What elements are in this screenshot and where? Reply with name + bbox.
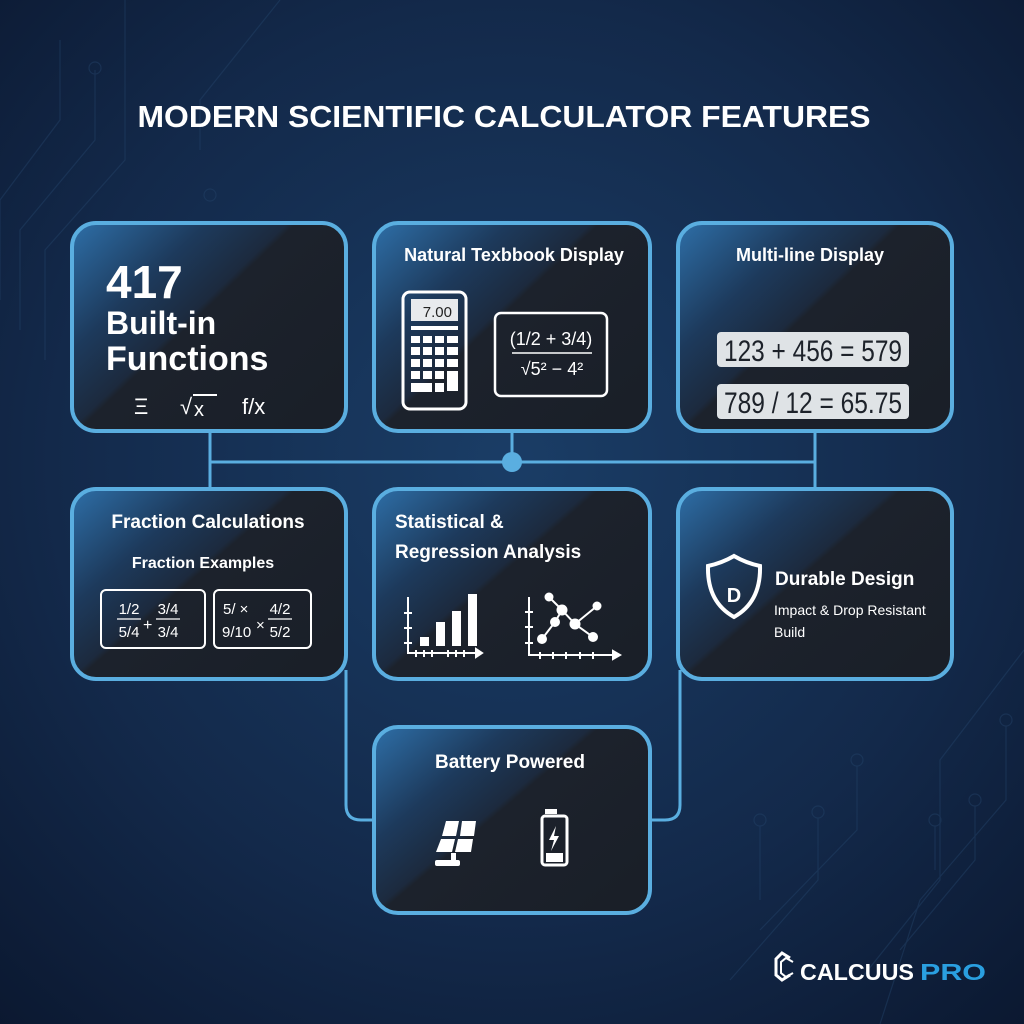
panel: fraction calculations: Fraction Calculations bbox=[111, 512, 305, 533]
icon: battery bbox=[542, 809, 567, 865]
panel: fraction calculations: Fraction Examples bbox=[132, 555, 274, 572]
logo: calcuus pro: PRO bbox=[920, 959, 986, 985]
icon: solar panel bbox=[435, 821, 476, 866]
formula box: (1/2 + 3/4) bbox=[510, 329, 592, 349]
fraction example 1: 5/4 bbox=[119, 624, 139, 641]
panel: multi-line display: Multi-line Display bbox=[736, 245, 884, 265]
panel: natural textbook display: Natural Texbbook Display bbox=[404, 245, 624, 265]
LCD line 1: 123 + 456 = 579 bbox=[724, 335, 902, 368]
panel: built-in functions: Functions bbox=[106, 340, 268, 378]
panel: durable design: Durable Design bbox=[775, 569, 914, 590]
icon: function symbols: Ξ bbox=[134, 394, 148, 419]
icon: function symbols: x bbox=[194, 399, 204, 421]
icon: calculator: 7.00 bbox=[423, 304, 452, 321]
panel: durable design bbox=[678, 489, 952, 679]
panel: multi-line display bbox=[678, 223, 952, 431]
title: MODERN SCIENTIFIC CALCULATOR FEATURES bbox=[138, 99, 871, 134]
icon: shield: D bbox=[727, 585, 741, 607]
panel: statistical & regression: Statistical & bbox=[395, 512, 504, 533]
icon: function symbols: √ bbox=[180, 394, 193, 419]
panel: fraction calculations bbox=[72, 489, 346, 679]
panel: statistical & regression: Regression Analysis bbox=[395, 542, 581, 563]
panel: natural textbook display bbox=[374, 223, 650, 431]
fraction example 2: 4/2 bbox=[270, 601, 290, 618]
fraction example 1: + bbox=[143, 617, 152, 634]
panel: built-in functions bbox=[72, 223, 346, 431]
panel: battery powered bbox=[374, 727, 650, 913]
fraction example 2: 9/10 bbox=[222, 624, 251, 641]
fraction example 2: 5/2 bbox=[270, 624, 290, 641]
logo: calcuus pro: CALCUUS bbox=[800, 959, 914, 985]
icon: function symbols: f/x bbox=[242, 394, 265, 419]
panel: durable design: Impact & Drop Resistant bbox=[774, 602, 926, 618]
panel: built-in functions: 417 bbox=[106, 256, 183, 308]
connector lines bbox=[210, 432, 815, 820]
fraction example 2: × bbox=[256, 617, 265, 634]
fraction example 1: 3/4 bbox=[158, 601, 178, 618]
panel: statistical & regression bbox=[374, 489, 650, 679]
formula box bbox=[495, 313, 607, 396]
panel: battery powered: Battery Powered bbox=[435, 752, 585, 773]
chart: bar chart bbox=[404, 594, 482, 657]
fraction example 1 bbox=[101, 590, 205, 648]
logo: calcuus pro bbox=[776, 953, 986, 985]
formula box: √5² − 4² bbox=[521, 359, 583, 379]
fraction example 1: 1/2 bbox=[119, 601, 139, 618]
panel: built-in functions: Built-in bbox=[106, 305, 216, 341]
icon: shield bbox=[708, 556, 760, 617]
icon: function symbols bbox=[134, 394, 265, 421]
fraction example 2: 5/ × bbox=[223, 601, 248, 618]
LCD line 2: 789 / 12 = 65.75 bbox=[724, 387, 902, 420]
fraction example 1: 3/4 bbox=[158, 624, 178, 641]
icon: calculator bbox=[403, 292, 466, 409]
panel: durable design: Build bbox=[774, 624, 805, 640]
fraction example 2 bbox=[214, 590, 311, 648]
chart: scatter bbox=[525, 594, 620, 659]
